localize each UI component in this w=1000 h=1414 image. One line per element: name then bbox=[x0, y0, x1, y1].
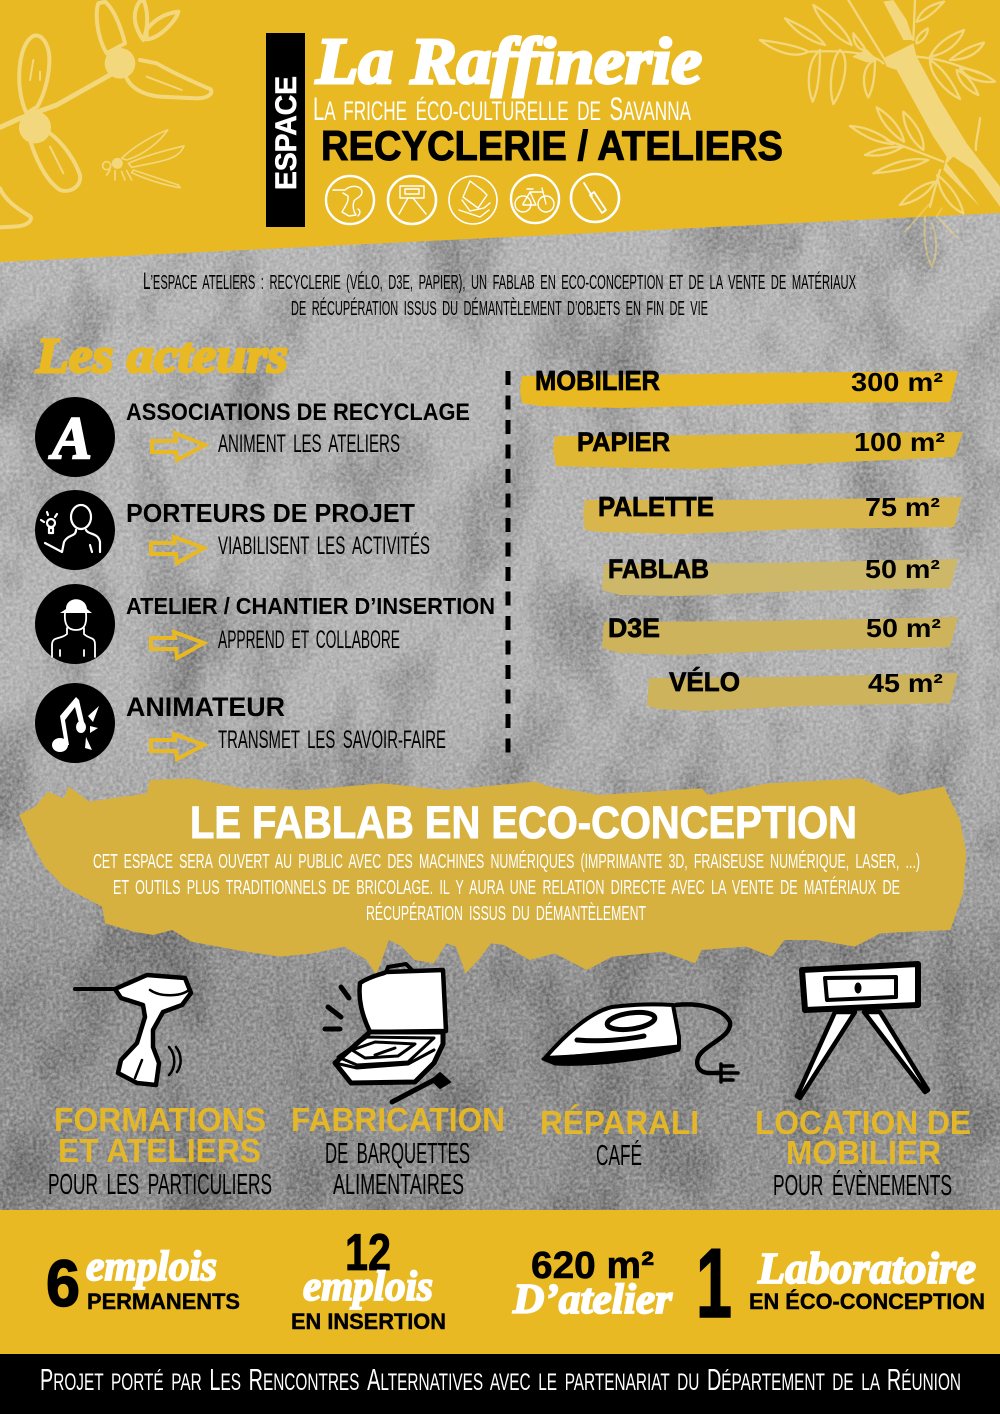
stat: 1 laboratoire: EN ÉCO-CONCEPTION bbox=[749, 1289, 985, 1314]
bar: fablab: 50 m² bbox=[865, 554, 940, 584]
bar: mobilier: 300 m² bbox=[851, 367, 943, 397]
bar: fablab bbox=[602, 554, 958, 596]
panel: reparali: CAFÉ bbox=[596, 1139, 642, 1172]
icon: flowers and dragonfly illustration bbox=[0, 1, 211, 227]
actor: associations: A bbox=[48, 405, 92, 471]
panel: location: LOCATION DE bbox=[755, 1104, 971, 1141]
actor: atelier chantier: ATELIER / CHANTIER D’INSERTION bbox=[126, 593, 495, 619]
stat: 12 emplois insertion: emplois bbox=[303, 1264, 433, 1310]
label: ESPACE vertical bar bbox=[266, 33, 305, 227]
actor: associations: ASSOCIATIONS DE RECYCLAGE bbox=[126, 399, 470, 426]
icon: bicycle bbox=[511, 175, 559, 223]
bar: mobilier bbox=[520, 365, 958, 408]
title: La Raffinerie: La Raffinerie bbox=[315, 25, 702, 98]
panel: fabrication: DE BARQUETTES bbox=[325, 1138, 470, 1170]
stat: 1 laboratoire: 1 bbox=[696, 1228, 732, 1338]
bar: palette bbox=[583, 491, 962, 534]
intro text bbox=[143, 268, 856, 320]
fablab description bbox=[93, 850, 920, 925]
stat: 620 m2 atelier bbox=[512, 1245, 673, 1323]
bar: velo bbox=[647, 666, 958, 711]
panel: formations: FORMATIONS bbox=[54, 1101, 266, 1138]
bar: mobilier: MOBILIER bbox=[535, 365, 660, 396]
panel: formations: ET ATELIERS bbox=[58, 1132, 261, 1169]
footer bar bbox=[0, 1354, 1000, 1414]
icon: screwdriver bbox=[571, 174, 619, 222]
bar: d3e bbox=[602, 613, 958, 655]
icon: paper bbox=[449, 176, 497, 224]
actor: associations: ANIMENT LES ATELIERS bbox=[218, 430, 400, 458]
bar: palette: 75 m² bbox=[865, 492, 940, 522]
icon: drill bbox=[75, 975, 191, 1085]
actor: associations bbox=[35, 397, 470, 477]
bar: fablab: FABLAB bbox=[608, 554, 709, 584]
icon: bamboo illustration bbox=[760, 0, 1000, 267]
panel: key figures band bbox=[0, 1210, 1000, 1354]
icon: stool table bbox=[797, 964, 928, 1098]
stat: 12 emplois insertion bbox=[291, 1224, 446, 1334]
panel: formations: POUR LES PARTICULIERS bbox=[48, 1169, 272, 1201]
bar: velo: VÉLO bbox=[669, 666, 740, 697]
icon: stool bbox=[388, 176, 436, 224]
icon: dragonfly bbox=[103, 130, 184, 188]
stat: 1 laboratoire bbox=[696, 1228, 985, 1338]
bar: velo: 45 m² bbox=[868, 668, 943, 698]
panel: location: MOBILIER bbox=[786, 1134, 941, 1171]
panel: location bbox=[755, 964, 971, 1202]
bar: papier: PAPIER bbox=[577, 427, 670, 457]
actor: porteurs de projet: VIABILISENT LES ACTIVITÉS bbox=[218, 531, 430, 560]
icon: iron bbox=[543, 1004, 738, 1082]
bar: papier: 100 m² bbox=[854, 427, 945, 457]
actor: porteurs de projet bbox=[35, 490, 430, 570]
panel: fabrication bbox=[291, 964, 505, 1201]
actor: atelier chantier bbox=[35, 584, 495, 664]
stat: 620 m2 atelier: 620 m² bbox=[531, 1245, 654, 1287]
panel: surface list bbox=[520, 365, 963, 711]
heading: fablab: LE FABLAB EN ECO-CONCEPTION bbox=[190, 797, 857, 848]
stat: 12 emplois insertion: EN INSERTION bbox=[291, 1309, 446, 1334]
bar: d3e: 50 m² bbox=[866, 613, 941, 643]
panel: fabrication: ALIMENTAIRES bbox=[333, 1169, 464, 1201]
heading: recyclerie ateliers: RECYCLERIE / ATELIERS bbox=[321, 122, 783, 169]
stat: 6 emplois permanents: emplois bbox=[86, 1244, 217, 1290]
bar: palette: PALETTE bbox=[598, 491, 714, 522]
actor: animateur bbox=[35, 683, 446, 763]
bar: papier bbox=[553, 427, 963, 469]
header band bbox=[0, 0, 1000, 267]
panel: formations bbox=[48, 975, 272, 1201]
stat: 620 m2 atelier: D’atelier bbox=[512, 1277, 673, 1323]
stat: 6 emplois permanents: 6 bbox=[46, 1246, 80, 1320]
panel: fabrication: FABRICATION bbox=[291, 1101, 505, 1138]
label: ESPACE vertical bar: ESPACE bbox=[270, 76, 303, 190]
actor: atelier chantier: APPREND ET COLLABORE bbox=[218, 626, 400, 654]
icons: five round activity icons bbox=[326, 174, 619, 224]
actor: porteurs de projet: PORTEURS DE PROJET bbox=[126, 498, 415, 528]
stat: 6 emplois permanents: PERMANENTS bbox=[87, 1289, 240, 1314]
panel: les acteurs bbox=[35, 327, 495, 763]
actor: animateur: ANIMATEUR bbox=[126, 692, 285, 722]
panel: fablab brush bbox=[19, 778, 966, 975]
icon: drill bbox=[326, 176, 374, 224]
stat: 1 laboratoire: Laboratoire bbox=[757, 1244, 976, 1293]
fablab description: RÉCUPÉRATION ISSUS DU DÉMANTÈLEMENT bbox=[366, 902, 646, 925]
footer bar: PROJET PORTÉ PAR LES RENCONTRES ALTERNATIVES AVEC LE PARTENARIAT DU DÉPARTEMENT DE LA RÉUNION bbox=[40, 1362, 961, 1397]
actor: animateur: TRANSMET LES SAVOIR-FAIRE bbox=[218, 726, 446, 754]
icon: food box bbox=[325, 964, 450, 1102]
stat: 6 emplois permanents bbox=[46, 1244, 240, 1320]
stat: 12 emplois insertion: 12 bbox=[345, 1224, 391, 1282]
panel: reparali: RÉPARALI bbox=[540, 1104, 699, 1141]
heading: Les acteurs: Les acteurs bbox=[35, 327, 288, 383]
bar: d3e: D3E bbox=[608, 613, 660, 643]
subtitle: LA FRICHE ÉCO-CULTURELLE DE SAVANNA bbox=[313, 91, 691, 127]
panel: reparali bbox=[540, 1004, 738, 1172]
